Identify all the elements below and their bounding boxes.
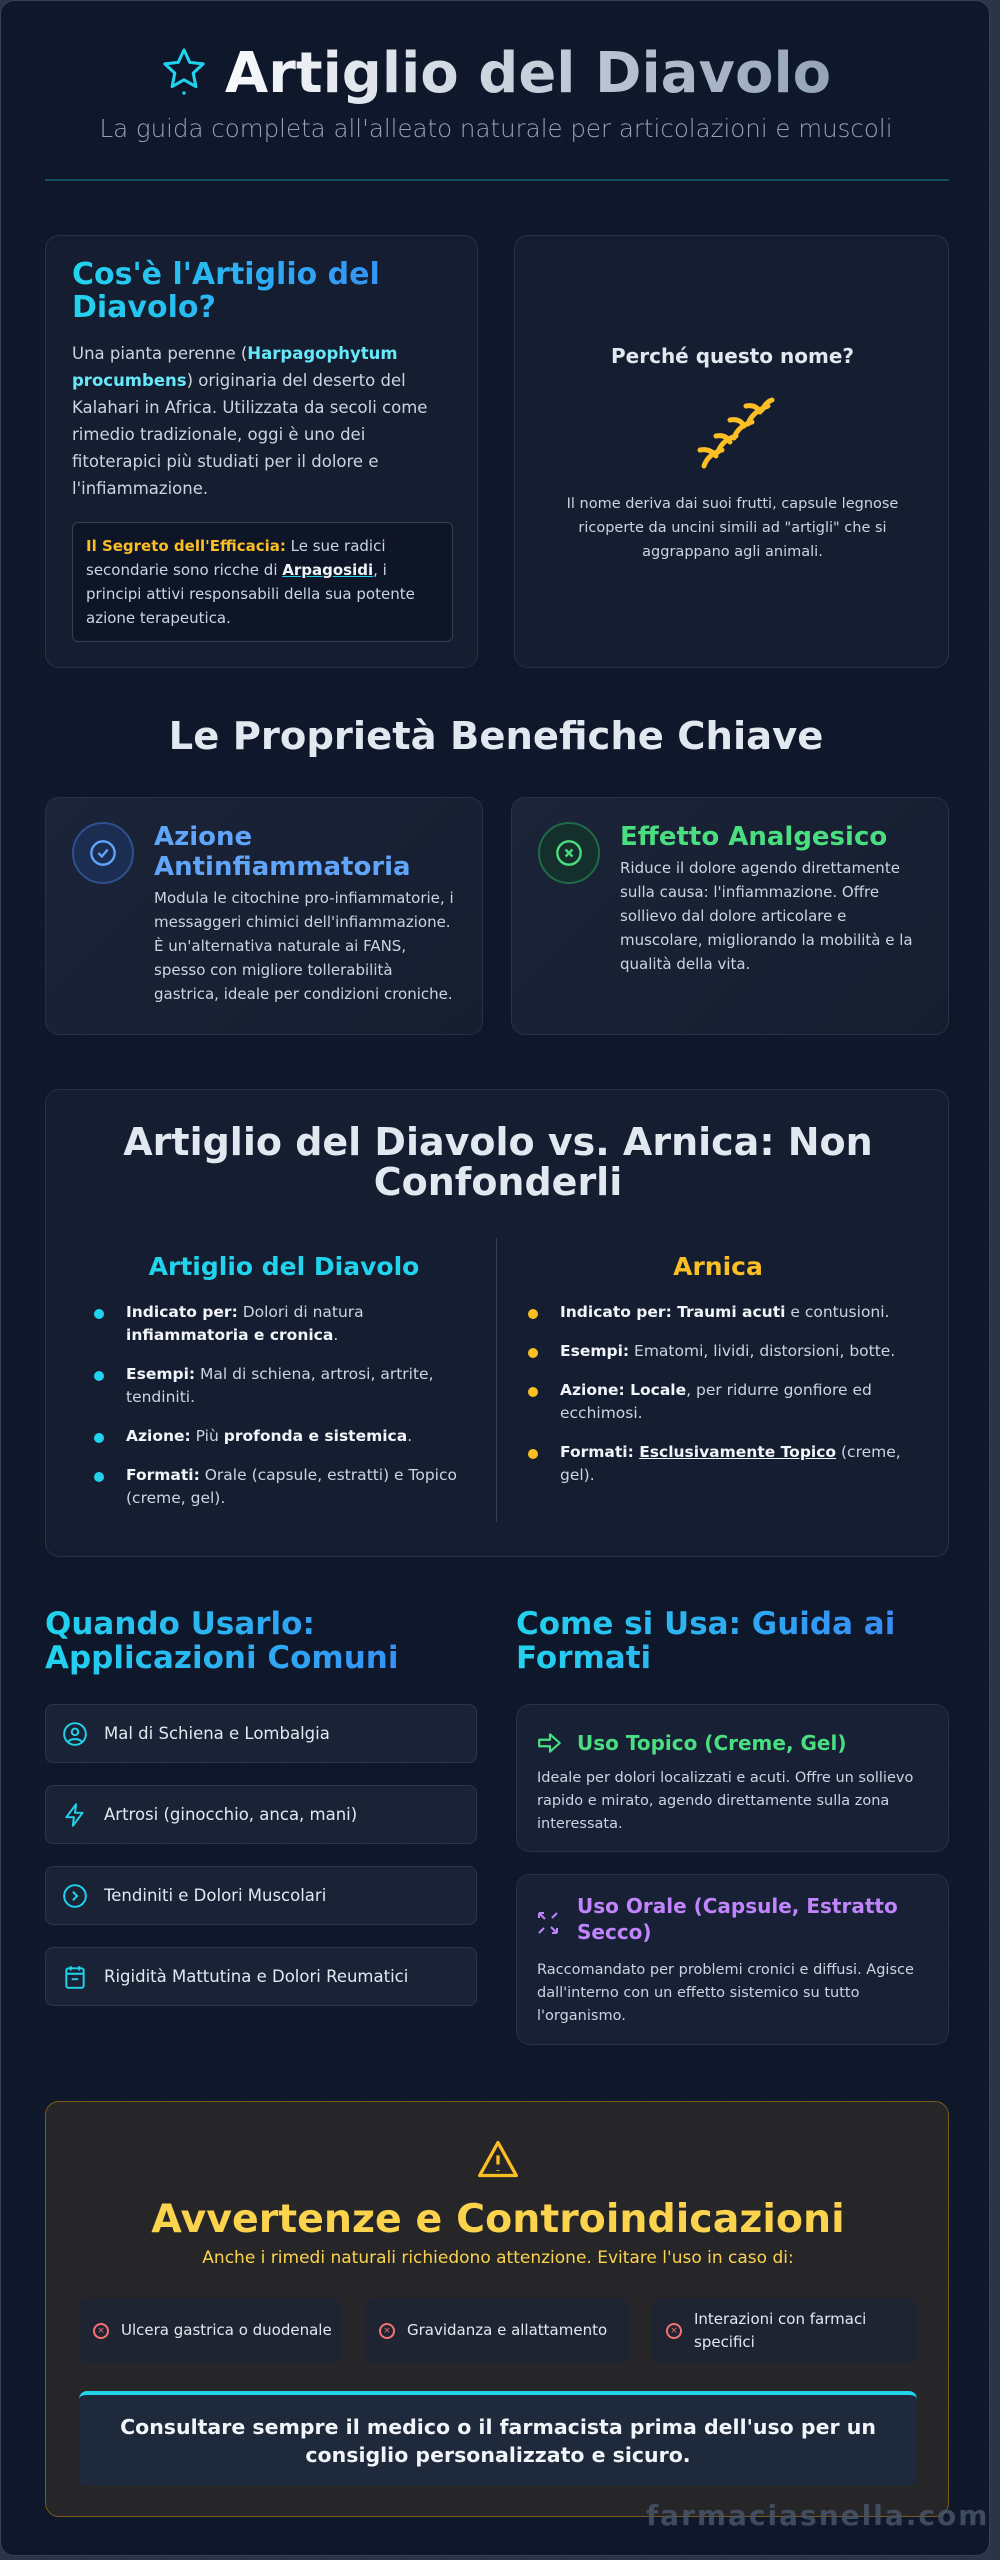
icon: check circle (72, 822, 134, 884)
heading: Perché questo nome? (611, 344, 854, 368)
item: pregnancy (365, 2298, 629, 2363)
callout: consult: Consultare sempre il medico o il farmacista prima dell'uso per un consiglio personalizzato e sicuro. (120, 2414, 876, 2466)
column: devil's claw: Azione: Più profonda e sistemica. (126, 1427, 412, 1445)
item: tendinitis: Tendiniti e Dolori Muscolari (104, 1886, 326, 1905)
panel: topical (516, 1704, 949, 1852)
column: arnica: Azione: Locale, per ridurre gonfiore ed ecchimosi. (560, 1381, 872, 1422)
column: devil's claw: Esempi: Mal di schiena, artrosi, artrite, tendiniti. (126, 1365, 434, 1406)
title (154, 822, 411, 882)
text: Riduce il dolore agendo direttamente sulla causa: l'infiammazione. Offre sollievo dal dolore articolare e muscolare, migliorando la mobilità e la qualità della vita. (620, 859, 913, 973)
icon: x circle (538, 822, 600, 884)
callout (72, 522, 453, 642)
column: devil's claw: Indicato per: Dolori di natura infiammatoria e cronica. (126, 1303, 364, 1344)
column: arnica (528, 1252, 901, 1484)
item: arthrosis (45, 1785, 477, 1844)
title: Artiglio del Diavolo (225, 41, 831, 106)
item: stiffness: Rigidità Mattutina e Dolori Reumatici (104, 1967, 408, 1986)
panel: name origin (514, 235, 949, 668)
watermark: farmaciasnella.com (646, 2499, 989, 2532)
column: devil's claw: Formati: Orale (capsule, estratti) e Topico (creme, gel). (126, 1466, 457, 1507)
panel: comparison (45, 1089, 949, 1557)
item: interactions (652, 2298, 917, 2363)
panel: oral (516, 1874, 949, 2045)
item: back pain (45, 1704, 477, 1763)
icon: star (163, 48, 205, 95)
item: pregnancy: Gravidanza e allattamento (407, 2321, 607, 2339)
title: Uso Orale (Capsule, Estratto Secco) (577, 1894, 898, 1944)
heading: Cos'è l'Artiglio del Diavolo? (72, 257, 380, 325)
callout: consult (79, 2391, 917, 2486)
title: Azione (154, 822, 252, 852)
column: arnica: Arnica (673, 1252, 763, 1281)
item: stiffness (45, 1947, 477, 2006)
heading: when to use: Quando Usarlo: Applicazioni Comuni (45, 1606, 398, 1676)
text: Una pianta perenne (Harpagophytum procumbens) originaria del deserto del Kalahari in Africa. Utilizzata da secoli come rimedio tradizionale, oggi è uno dei fitoterapici più studiati per il dolore e l'infiammazione. (72, 344, 427, 498)
icon: arrows (538, 1912, 558, 1934)
column: arnica: Formati: Esclusivamente Topico (creme, gel). (560, 1443, 901, 1484)
item: arthrosis: Artrosi (ginocchio, anca, mani) (104, 1805, 357, 1824)
subtitle: La guida completa all'alleato naturale per articolazioni e muscoli (99, 114, 893, 143)
title: Effetto Analgesico (620, 822, 887, 852)
icon: warning (478, 2140, 518, 2178)
title: Antinfiammatoria (154, 852, 411, 882)
column: arnica: Indicato per: Traumi acuti e contusioni. (560, 1303, 889, 1321)
item: ulcer: × (97, 2326, 105, 2336)
panel: what is it (45, 235, 478, 668)
column: devil's claw: Artiglio del Diavolo (149, 1252, 419, 1281)
panel: anti-inflammatory (45, 797, 483, 1035)
callout: Il Segreto dell'Efficacia: Le sue radici secondarie sono ricche di Arpagosidi, i principi attivi responsabili della sua potente azione terapeutica. (86, 537, 415, 627)
item: ulcer: Ulcera gastrica o duodenale (121, 2321, 332, 2339)
text: Raccomandato per problemi cronici e diffusi. Agisce dall'interno con un effetto sistemico su tutto l'organismo. (537, 1962, 914, 2024)
title: Avvertenze e Controindicazioni (151, 2196, 845, 2242)
heading: Confonderli (374, 1160, 622, 1204)
item: pregnancy: × (383, 2326, 391, 2336)
text: Modula le citochine pro-infiammatorie, i messaggeri chimici dell'infiammazione. È un'alternativa naturale ai FANS, spesso con migliore tollerabilità gastrica, ideale per condizioni croniche. (154, 889, 454, 1003)
item: ulcer (79, 2298, 342, 2363)
panel: warnings (45, 2101, 949, 2517)
icon: claws (698, 398, 774, 468)
item: back pain: Mal di Schiena e Lombalgia (104, 1724, 330, 1743)
column: devil's claw (94, 1252, 457, 1507)
item: interactions: × (670, 2326, 678, 2336)
item: tendinitis (45, 1866, 477, 1925)
text: Ideale per dolori localizzati e acuti. Offre un sollievo rapido e mirato, agendo direttamente sulla zona interessata. (537, 1770, 913, 1832)
subtitle: Anche i rimedi naturali richiedono attenzione. Evitare l'uso in caso di: (202, 2248, 794, 2268)
heading: how to use: Come si Usa: Guida ai Formati (516, 1606, 895, 1676)
heading: properties: Le Proprietà Benefiche Chiave (169, 714, 823, 759)
header (99, 41, 893, 143)
item: interactions: Interazioni con farmaci specifici (694, 2310, 866, 2350)
column: arnica: Esempi: Ematomi, lividi, distorsioni, botte. (560, 1342, 895, 1360)
title: Uso Topico (Creme, Gel) (577, 1731, 846, 1755)
heading (123, 1120, 873, 1204)
heading: Artiglio del Diavolo vs. Arnica: Non (123, 1120, 873, 1164)
text: Il nome deriva dai suoi frutti, capsule legnose ricoperte da uncini simili ad "artigli" che si aggrappano agli animali. (567, 496, 898, 560)
panel: analgesic (511, 797, 949, 1035)
